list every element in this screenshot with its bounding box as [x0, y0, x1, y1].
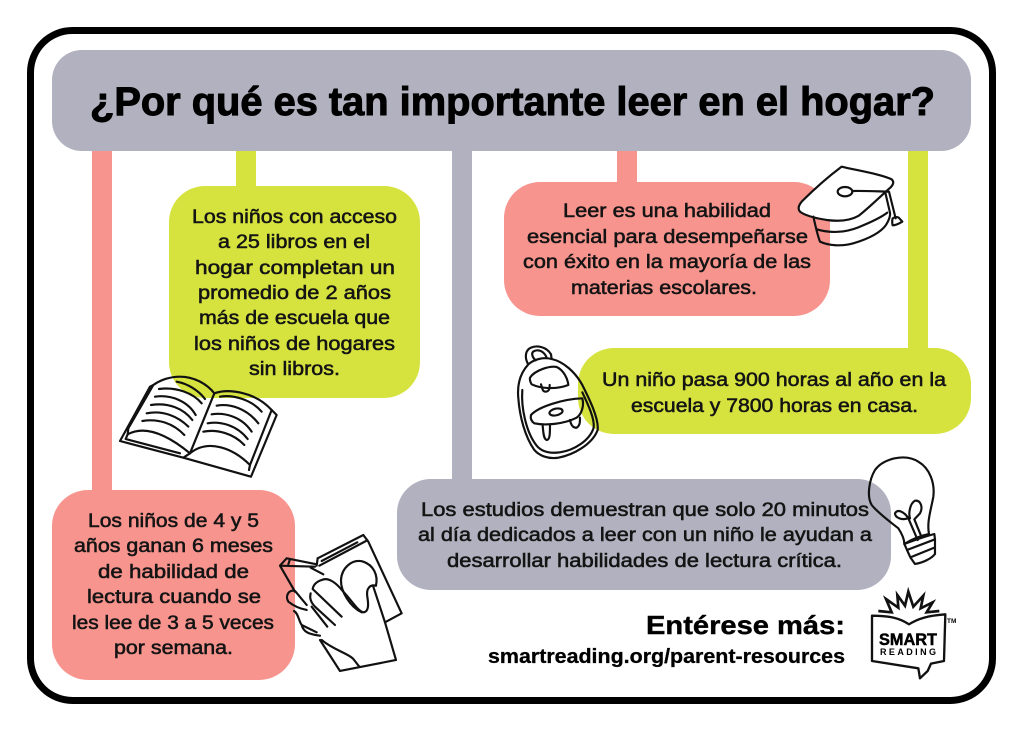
- panel: 4 and 5 year olds: les lee de 3 a 5 veces: [72, 612, 274, 634]
- panel: 4 and 5 year olds: años ganan 6 meses: [74, 535, 273, 557]
- panel: 25 books: a 25 libros en el: [218, 231, 370, 253]
- panel: 20 minutes: Los estudios demuestran que solo 20 minutos: [421, 499, 869, 521]
- logo: Smart Reading: SMART: [879, 631, 937, 649]
- panel: 4 and 5 year olds: de habilidad de: [98, 561, 249, 583]
- panel: 4 and 5 year olds: por semana.: [114, 637, 233, 659]
- icon: light bulb: [869, 458, 935, 564]
- panel: 25 books: hogar completan un: [195, 257, 395, 279]
- call to action: [488, 610, 845, 668]
- panel: 25 books: [169, 186, 420, 398]
- logo: Smart Reading: READING: [880, 647, 936, 657]
- icon: hands holding a book: [280, 535, 402, 671]
- title banner: [52, 50, 971, 151]
- panel: 25 books: Los niños con acceso: [192, 206, 397, 228]
- call to action: smartreading.org/parent-resources: [488, 646, 845, 668]
- title: ¿Por qué es tan importante leer en el hogar?: [90, 80, 935, 124]
- panel: 4 and 5 year olds: [52, 490, 295, 680]
- panel: 20 minutes: desarrollar habilidades de lectura crítica.: [447, 550, 842, 572]
- panel: essential skill: [504, 182, 830, 316]
- panel: essential skill: materias escolares.: [571, 277, 757, 299]
- panel: hours at home: escuela y 7800 horas en casa.: [631, 395, 918, 417]
- panel: hours at home: [578, 348, 971, 434]
- panel: 25 books: promedio de 2 años: [198, 282, 391, 304]
- call to action: Entérese más:: [646, 610, 845, 640]
- panel: 4 and 5 year olds: lectura cuando se: [87, 586, 261, 608]
- panel: 25 books: sin libros.: [249, 358, 340, 380]
- panel: essential skill: con éxito en la mayoría de las: [523, 251, 811, 273]
- panel: 20 minutes: al día dedicados a leer con un niño le ayudan a: [418, 524, 872, 546]
- icon: backpack: [518, 346, 598, 458]
- logo: Smart Reading: [872, 592, 956, 678]
- panel: hours at home: Un niño pasa 900 horas al año en la: [602, 369, 946, 391]
- panel: 25 books: más de escuela que: [199, 307, 390, 329]
- logo: Smart Reading: TM: [947, 618, 956, 625]
- panel: 4 and 5 year olds: Los niños de 4 y 5: [88, 510, 259, 532]
- icon: open book: [120, 377, 277, 477]
- panel: 20 minutes: [397, 479, 891, 590]
- icon: graduation cap: [799, 167, 902, 245]
- panel: 25 books: los niños de hogares: [194, 333, 395, 355]
- panel: essential skill: Leer es una habilidad: [563, 200, 771, 222]
- panel: essential skill: esencial para desempeñarse: [527, 226, 808, 248]
- connector bars: [92, 150, 928, 492]
